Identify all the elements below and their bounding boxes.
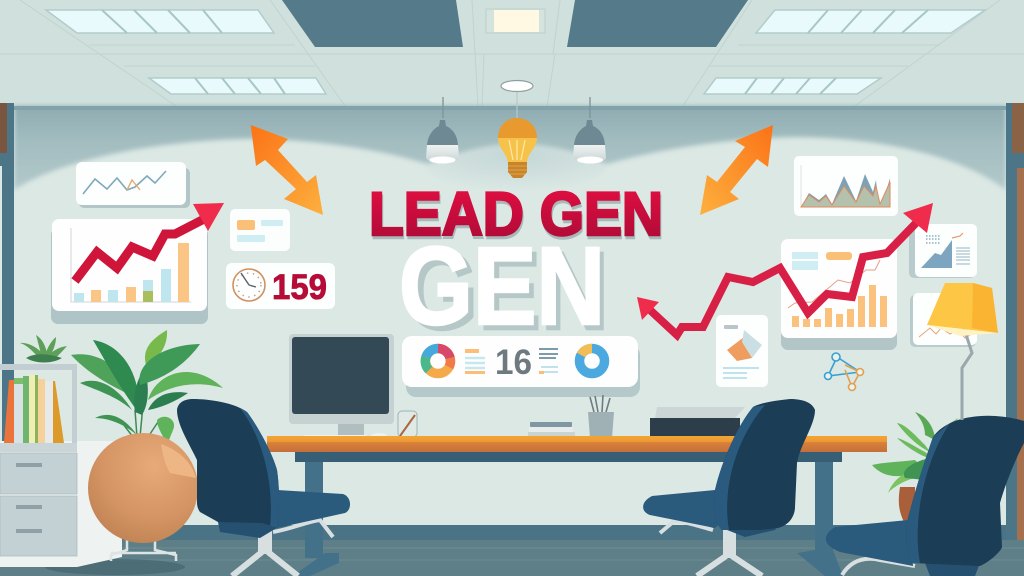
dark ceiling panel right bbox=[567, 0, 748, 47]
card: mini report bbox=[909, 224, 977, 278]
desk bbox=[267, 436, 887, 576]
glass with pen bbox=[398, 411, 417, 437]
legend lines right bbox=[539, 349, 558, 374]
small shelf plant bbox=[20, 335, 67, 362]
card: small line chart bbox=[76, 162, 190, 208]
monitor bbox=[289, 334, 394, 439]
ceiling light: top left bbox=[46, 10, 274, 33]
legend lines left bbox=[465, 349, 485, 374]
icon: multicolour donut bbox=[425, 348, 450, 374]
plant right bbox=[872, 412, 958, 522]
red rising arrow left bbox=[75, 203, 224, 281]
orange double arrow right bbox=[700, 125, 773, 215]
icon: light bulb bbox=[498, 92, 537, 178]
printer bbox=[650, 407, 745, 438]
ceiling light: lower right bbox=[704, 78, 881, 94]
dark ceiling panel left bbox=[282, 0, 463, 47]
pendant lamp right bbox=[573, 97, 606, 164]
books bbox=[4, 375, 64, 443]
chair left bbox=[177, 399, 350, 576]
pen cup bbox=[588, 395, 614, 438]
card: dashboard chart with red trend bbox=[781, 239, 897, 350]
red arrow right bbox=[637, 203, 933, 335]
ceiling light: top right bbox=[756, 10, 985, 33]
bars bbox=[792, 285, 887, 327]
leaves bbox=[71, 330, 223, 445]
chair right bbox=[826, 416, 1024, 576]
orange double arrow left bbox=[251, 125, 323, 215]
card: legend bars bbox=[230, 209, 290, 251]
right pillar bbox=[1006, 103, 1024, 550]
title: GEN: GEN bbox=[399, 225, 605, 348]
back wall bbox=[14, 106, 1006, 528]
floor lamp bbox=[927, 283, 998, 420]
floor bbox=[0, 540, 1024, 576]
center ceiling light bbox=[486, 9, 545, 33]
stats panel with donuts bbox=[402, 336, 640, 397]
card: area chart bbox=[794, 156, 898, 216]
stat number 16: 16 bbox=[495, 343, 532, 382]
baseboard bbox=[14, 525, 1006, 540]
ceiling bbox=[0, 0, 1024, 110]
pendant lamp left bbox=[426, 97, 459, 164]
stack of books bbox=[528, 422, 575, 438]
chair centre bbox=[643, 399, 815, 576]
card: bar chart with rising arrow bbox=[51, 219, 208, 324]
large potted plant bbox=[71, 330, 223, 561]
title: GEN: GEN bbox=[405, 230, 609, 353]
title: LEAD GEN: LEAD GEN bbox=[369, 180, 663, 248]
card: behind lamp line chart bbox=[910, 293, 977, 347]
card: clock stat 159 bbox=[226, 263, 335, 309]
icon: clock bbox=[233, 269, 265, 301]
left pillar bbox=[0, 103, 14, 536]
title: LEAD GEN: LEAD GEN bbox=[370, 183, 664, 251]
bars bbox=[74, 243, 189, 302]
icon: network diagram bbox=[824, 353, 864, 390]
ceiling light: lower left bbox=[149, 78, 326, 94]
card: document with funnel bbox=[716, 315, 768, 387]
stat number: 159 bbox=[272, 268, 327, 307]
shelf unit with books bbox=[0, 335, 122, 567]
ceiling spotlight bbox=[501, 80, 533, 92]
icon: blue donut bbox=[580, 348, 604, 374]
drawers bbox=[0, 453, 77, 556]
desk items group bbox=[289, 334, 745, 439]
